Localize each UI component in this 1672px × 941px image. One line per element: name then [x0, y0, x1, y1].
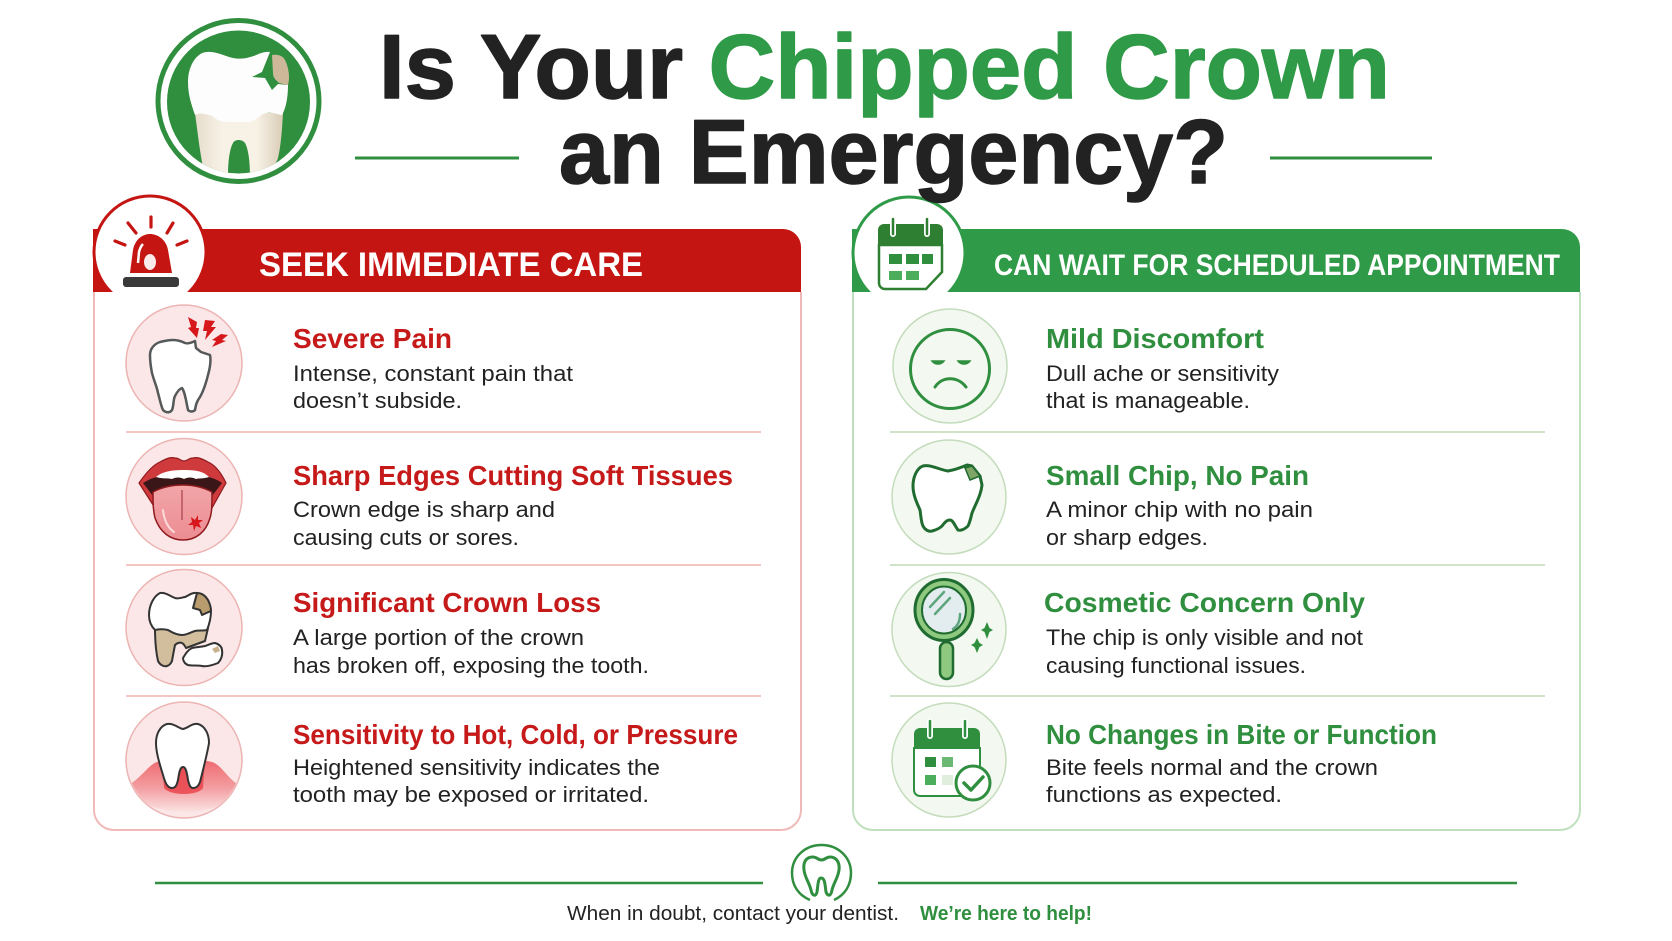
text: cosmetic concern: The chip is only visible and not	[1046, 625, 1363, 650]
text: severe pain: doesn’t subside.	[293, 388, 462, 413]
text: mild discomfort	[1046, 323, 1279, 413]
text: mild discomfort: that is manageable.	[1046, 388, 1250, 413]
panel: can wait for scheduled appointment	[852, 197, 1580, 830]
text: no changes: Bite feels normal and the crown	[1046, 755, 1378, 780]
icon: severe pain tooth	[126, 305, 242, 421]
title: an Emergency?	[559, 102, 1228, 203]
icon: footer tooth	[792, 845, 851, 900]
text: small chip: Small Chip, No Pain	[1046, 460, 1309, 491]
icon: calendar badge	[852, 196, 964, 292]
footer: We’re here to help!	[920, 902, 1092, 925]
footer text: When in doubt, contact your dentist.	[567, 902, 899, 925]
text: sharp edges: Crown edge is sharp and	[293, 497, 555, 522]
icon: broken crown	[126, 570, 242, 686]
panel header: red banner	[93, 229, 801, 292]
text: small chip: A minor chip with no pain	[1046, 497, 1313, 522]
text: small chip	[1046, 460, 1313, 550]
icon: siren badge	[92, 194, 204, 292]
panel heading: CAN WAIT FOR SCHEDULED APPOINTMENT	[994, 249, 1560, 282]
panel: seek immediate care	[93, 196, 801, 830]
text: sensitivity	[293, 719, 738, 807]
icon: sensitive tooth and gums	[125, 702, 242, 818]
text: significant crown loss: A large portion of the crown	[293, 625, 584, 650]
icon: small chip tooth	[892, 440, 1006, 554]
text: sensitivity: Sensitivity to Hot, Cold, or Pressure	[293, 719, 738, 750]
title	[379, 17, 1390, 203]
icon: hand mirror	[892, 572, 1006, 686]
icon: chipped tooth emblem	[158, 20, 319, 182]
icon: mouth and tongue	[126, 438, 242, 554]
text: sharp edges: Sharp Edges Cutting Soft Tissues	[293, 460, 733, 491]
text: no changes: functions as expected.	[1046, 782, 1282, 807]
text: cosmetic concern	[1044, 587, 1365, 678]
title: Is Your Chipped Crown	[379, 17, 1390, 118]
text: significant crown loss	[293, 587, 649, 678]
text: no changes	[1046, 719, 1437, 807]
panel header: green banner	[852, 229, 1580, 292]
icon: sad face	[893, 309, 1007, 423]
text: small chip: or sharp edges.	[1046, 525, 1208, 550]
text: cosmetic concern: Cosmetic Concern Only	[1044, 587, 1365, 618]
text: cosmetic concern: causing functional issues.	[1046, 653, 1306, 678]
text: no changes: No Changes in Bite or Function	[1046, 719, 1437, 750]
text: mild discomfort: Mild Discomfort	[1046, 323, 1264, 354]
panel heading: SEEK IMMEDIATE CARE	[259, 246, 643, 284]
text: sharp edges: causing cuts or sores.	[293, 525, 519, 550]
footer	[155, 845, 1517, 925]
text: sensitivity: Heightened sensitivity indicates the	[293, 755, 660, 780]
text: sensitivity: tooth may be exposed or irritated.	[293, 782, 649, 807]
text: significant crown loss: has broken off, exposing the tooth.	[293, 653, 649, 678]
text: significant crown loss: Significant Crown Loss	[293, 587, 601, 618]
text: severe pain: Intense, constant pain that	[293, 361, 573, 386]
icon: calendar with check	[892, 703, 1006, 817]
text: sharp edges	[293, 460, 733, 550]
text: mild discomfort: Dull ache or sensitivity	[1046, 361, 1279, 386]
text: severe pain: Severe Pain	[293, 323, 452, 354]
text: severe pain	[293, 323, 573, 413]
